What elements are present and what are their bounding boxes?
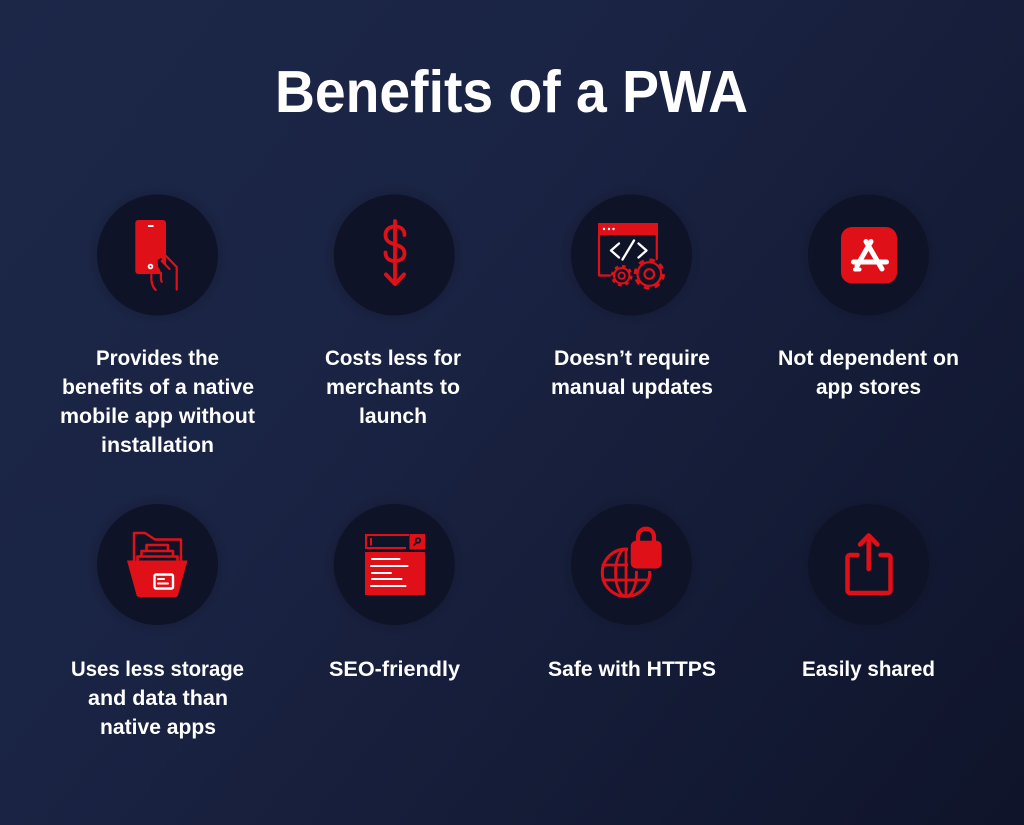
label: app stores: [816, 376, 921, 399]
label: merchants to: [326, 376, 460, 399]
panel: lower cost: [322, 183, 466, 428]
label: native apps: [100, 716, 216, 739]
title: Benefits of a PWA: [275, 59, 748, 125]
label: [551, 347, 713, 399]
label: mobile app without: [60, 405, 255, 428]
label: SEO-friendly: [329, 658, 460, 681]
label: [325, 347, 461, 428]
label: Easily shared: [802, 658, 935, 681]
icon: dollar with down arrow: [386, 221, 404, 284]
label: Not dependent on: [778, 347, 959, 370]
label: installation: [101, 434, 214, 457]
icon: code window with gears: [598, 223, 664, 288]
panel: app stores: [778, 183, 959, 399]
label: benefits of a native: [62, 376, 254, 399]
icon: phone in hand: [135, 220, 177, 290]
panel: SEO: [322, 492, 466, 681]
icon: app store: [841, 227, 897, 284]
panel: automatic updates: [551, 183, 713, 399]
icon: share arrow: [848, 536, 890, 593]
label: Provides the: [96, 347, 219, 370]
label: [778, 347, 959, 399]
icon: folder with files: [127, 533, 188, 597]
label: [71, 658, 244, 739]
icon: globe with padlock: [602, 529, 664, 596]
label: Uses less storage: [71, 658, 244, 681]
label: [60, 347, 255, 457]
panel: less storage: [71, 492, 244, 739]
icon: search results page: [365, 534, 425, 595]
label: Safe with HTTPS: [548, 658, 716, 681]
panel: HTTPS: [548, 492, 716, 681]
label: manual updates: [551, 376, 713, 399]
panel: sharing: [796, 492, 940, 681]
label: Doesn’t require: [554, 347, 710, 370]
label: Costs less for: [325, 347, 461, 370]
panel: native app benefits: [60, 183, 255, 457]
label: launch: [359, 405, 427, 428]
label: and data than: [88, 687, 228, 710]
